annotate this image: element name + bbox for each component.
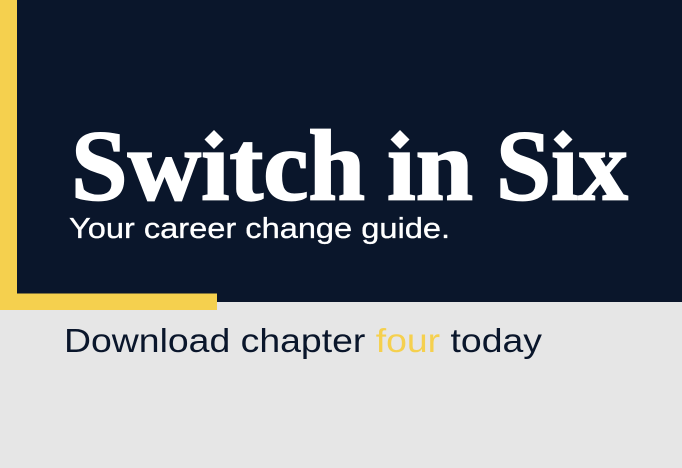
title [71,110,628,222]
yellow corner bracket [0,0,217,310]
call to action: Download chapter four today [64,322,543,359]
panel: navy header [0,0,682,302]
title: in [387,110,473,222]
title: Switch [71,110,365,222]
title: Six [496,110,628,222]
subtitle: Your career change guide. [69,213,450,245]
